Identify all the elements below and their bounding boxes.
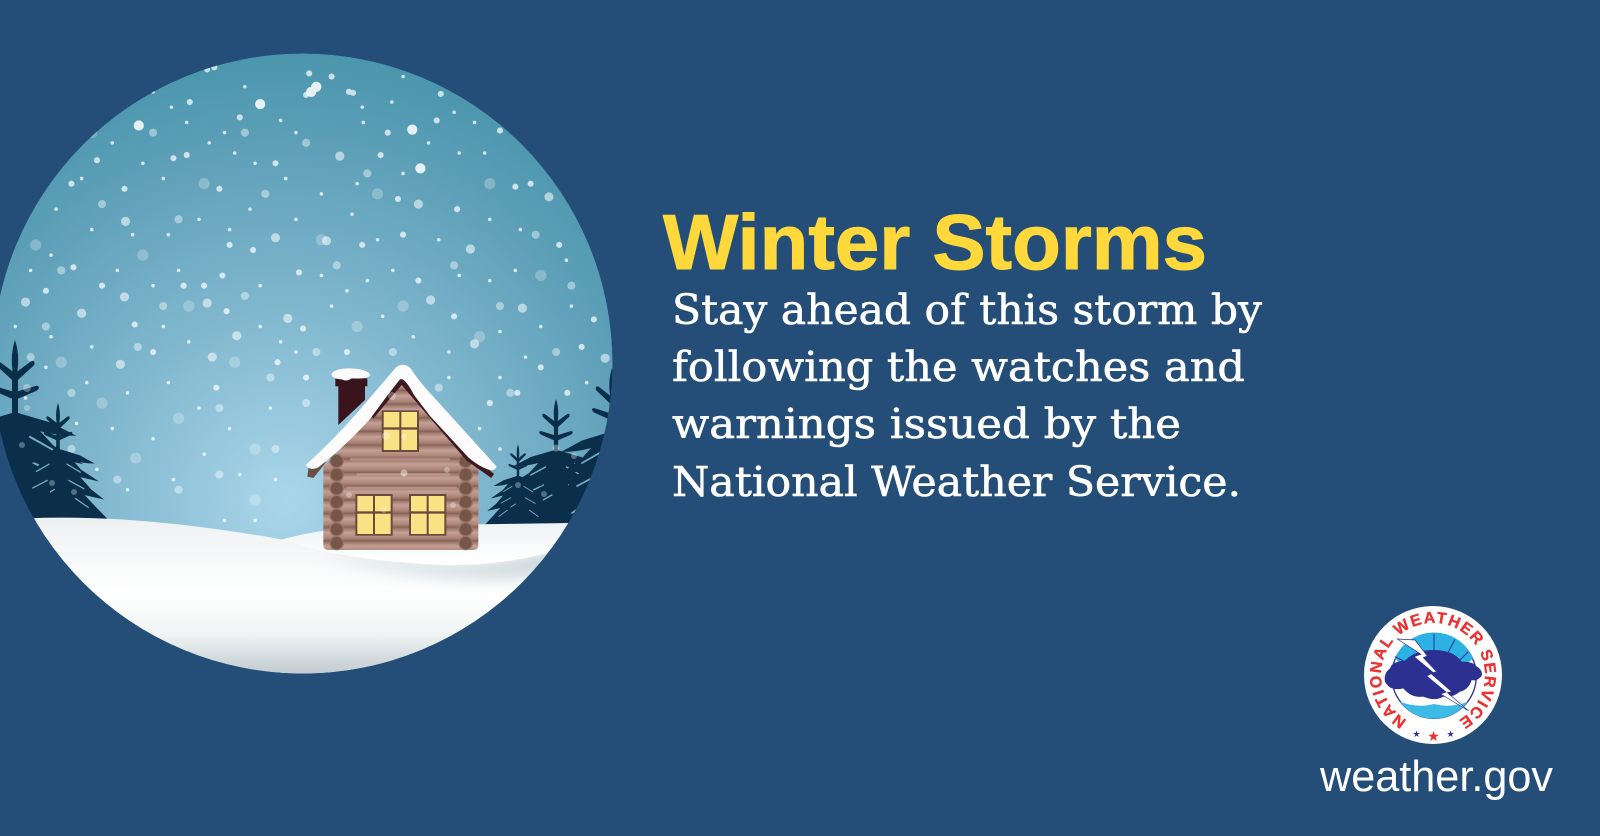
logo stars: ★ [1446, 730, 1455, 740]
pine trees left [0, 340, 110, 528]
logo stars: ★ [1427, 729, 1440, 745]
website url: weather.gov [1319, 752, 1553, 801]
roof eaves [307, 376, 494, 478]
snow drift shadow [351, 553, 548, 585]
body text: warnings issued by the [672, 400, 1181, 448]
body text: Stay ahead of this storm by [672, 286, 1263, 334]
falling snow behind scene [15, 67, 605, 520]
illustration: snowy cabin globe [0, 54, 612, 674]
logo stars: ★ [1412, 730, 1421, 740]
windows [355, 410, 446, 536]
NWS logo: NATIONAL WEATHER SERVICE [1370, 612, 1496, 729]
snow drift back [280, 523, 568, 674]
logo ring text [1381, 623, 1485, 720]
logo stars [1412, 729, 1455, 745]
snow drift front [34, 518, 548, 674]
corner logs [330, 454, 472, 550]
log walls [323, 380, 478, 550]
night sky [0, 54, 612, 674]
snow on roof [306, 365, 497, 470]
chimney [331, 368, 370, 425]
body text [672, 286, 1263, 506]
pine trees right [485, 368, 612, 533]
falling snow in front of scene [19, 384, 577, 513]
body text: following the watches and [672, 343, 1245, 391]
title: Winter Storms [663, 198, 1207, 286]
logo emblem [1385, 632, 1482, 719]
body text: National Weather Service. [672, 458, 1241, 506]
logo disc [1364, 606, 1502, 744]
log cabin [306, 365, 497, 550]
